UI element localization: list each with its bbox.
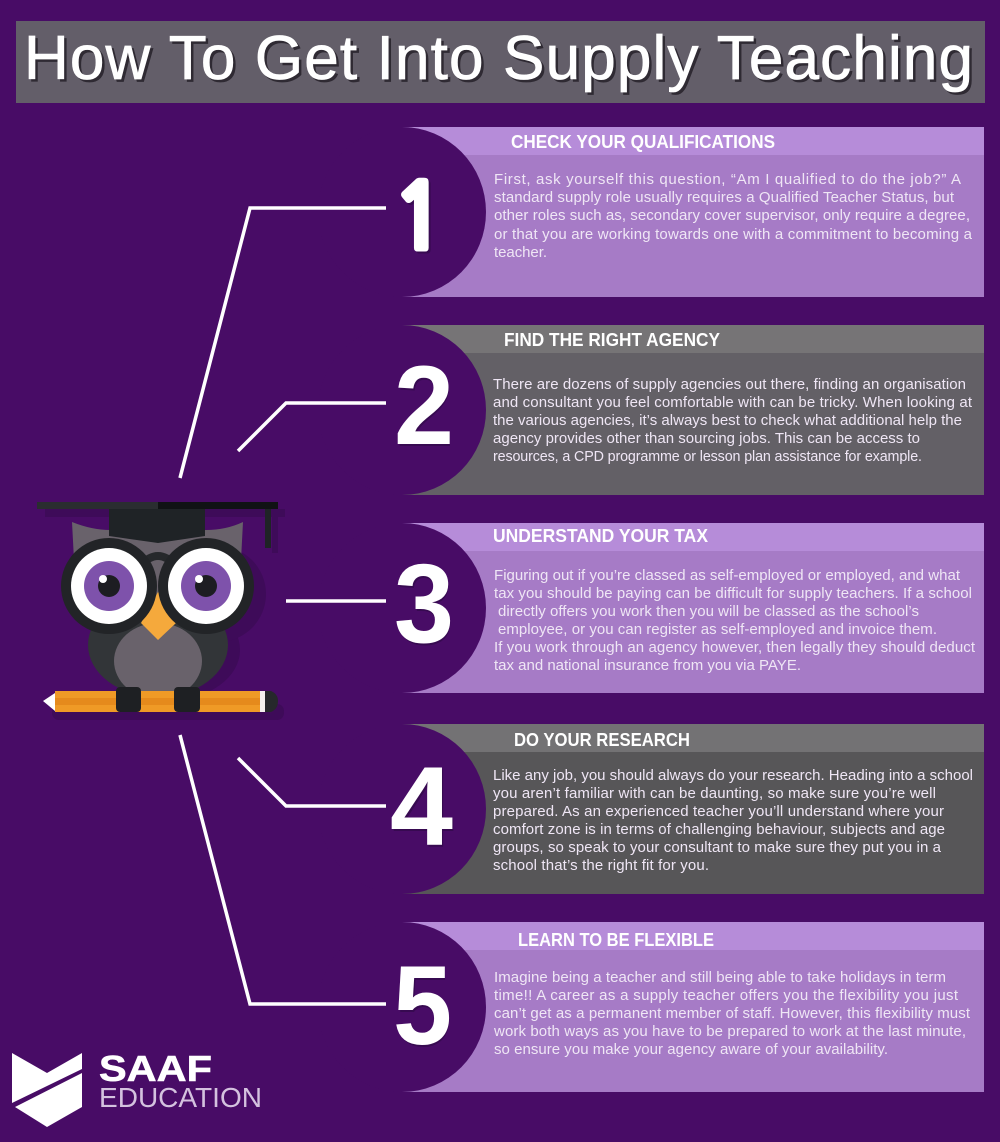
panel: step 5 learn to be flexible: time!! A career as a supply teacher offers you the flexibility you just — [494, 987, 959, 1004]
panel: step 2 find the right agency: and consultant you feel comfortable with can be tricky. When looking at — [493, 394, 973, 411]
panel: step 3 understand your tax: 3 — [396, 543, 454, 668]
panel: step 4 do your research: prepared. As an experienced teacher you’ll understand where your — [493, 803, 944, 820]
panel: step 3 understand your tax: directly offers you work then you will be classed as the school’s — [498, 603, 919, 620]
owl claws — [116, 687, 141, 712]
owl head and ears — [72, 522, 243, 610]
icon: owl with graduation cap and pencil — [37, 502, 285, 720]
panel: step 4 do your research: DO YOUR RESEARCH — [514, 730, 690, 750]
panel: step 4 do your research: Like any job, you should always do your research. Heading into a school — [493, 767, 973, 784]
panel: step 5 learn to be flexible: so ensure you make your agency aware of your availability. — [494, 1041, 888, 1058]
owl beak — [141, 592, 176, 640]
panel: step 2 find the right agency — [318, 325, 984, 495]
panel: step 3 understand your tax: 3 — [394, 541, 454, 666]
title banner: How To Get Into Supply Teaching — [24, 24, 973, 93]
panel: step 5 learn to be flexible: LEARN TO BE FLEXIBLE — [518, 930, 714, 950]
panel: step 1 check your qualifications: 1 — [394, 176, 449, 264]
panel: step 1 check your qualifications: or that you are working towards one with a commitment to becoming a — [494, 226, 973, 243]
logo: SAAF Education — [12, 1048, 262, 1127]
panel: step 2 find the right agency: the various agencies, it’s always best to check what additional help the — [493, 412, 962, 429]
panel: step 1 check your qualifications: First, ask yourself this question, “Am I qualified to do the job?” A — [494, 171, 961, 188]
logo: SAAF Education: SAAF — [99, 1048, 212, 1089]
panel: step 4 do your research: school that’s the right fit for you. — [493, 857, 709, 874]
panel: step 4 do your research: groups, so speak to your consultant to make sure they put you in a — [493, 839, 942, 856]
panel: step 3 understand your tax: employee, or you can register as self-employed and invoice them. — [498, 621, 937, 638]
panel: step 2 find the right agency: There are dozens of supply agencies out there, finding an organisation — [493, 376, 966, 393]
panel: step 2 find the right agency: agency provides other than sourcing jobs. This can be access to — [493, 430, 920, 447]
panel: step 1 check your qualifications: standard supply role usually requires a Qualified Teacher Status, but — [494, 189, 955, 206]
panel: step 1 check your qualifications: teacher. — [494, 244, 547, 261]
panel: step 2 find the right agency: resources, a CPD programme or lesson plan assistance for example. — [493, 449, 922, 465]
logo: SAAF Education: EDUCATION — [99, 1082, 262, 1113]
title banner: How To Get Into Supply Teaching — [26, 26, 976, 96]
panel: step 1 check your qualifications: 1 — [392, 174, 447, 262]
owl belly — [114, 623, 202, 699]
panel: step 1 check your qualifications: other roles such as, secondary cover supervisor, only require a degree, — [494, 207, 970, 224]
panel: step 3 understand your tax: tax and national insurance from you via PAYE. — [494, 657, 801, 674]
panel: step 5 learn to be flexible: Imagine being a teacher and still being able to take holidays in term — [494, 969, 946, 986]
panel: step 5 learn to be flexible: work both ways as you have to be prepared to work at the last minute, — [493, 1023, 966, 1040]
connector lines from owl to numbers — [180, 208, 386, 1004]
panel: step 4 do your research: comfort zone is in terms of challenging behaviour, subjects and age — [493, 821, 945, 838]
panel: step 2 find the right agency: 2 — [396, 345, 454, 470]
panel: step 3 understand your tax: Figuring out if you’re classed as self-employed or employed, and what — [494, 567, 961, 584]
panel: step 5 learn to be flexible: can’t get as a permanent member of staff. However, this flexibility must — [494, 1005, 971, 1022]
pencil — [43, 691, 278, 712]
panel: step 3 understand your tax — [318, 523, 984, 693]
panel: step 4 do your research: you aren’t familiar with can be daunting, so make sure you’re well — [493, 785, 936, 802]
panel: step 4 do your research: 4 — [392, 746, 454, 871]
panel: step 2 find the right agency: FIND THE RIGHT AGENCY — [504, 330, 720, 350]
owl body — [88, 593, 228, 697]
panel: step 3 understand your tax: UNDERSTAND YOUR TAX — [493, 526, 708, 546]
panel: step 4 do your research — [318, 724, 984, 894]
mortarboard cap — [37, 502, 278, 548]
panel: step 3 understand your tax: tax you should be paying can be difficult for supply teachers. If a school — [494, 585, 972, 602]
panel: step 1 check your qualifications: CHECK YOUR QUALIFICATIONS — [511, 132, 775, 152]
panel: step 5 learn to be flexible: 5 — [393, 943, 452, 1068]
panel: step 3 understand your tax: If you work through an agency however, then legally they should deduct — [494, 639, 976, 656]
panel: step 5 learn to be flexible: 5 — [395, 945, 452, 1070]
panel: step 2 find the right agency: 2 — [394, 343, 454, 468]
owl drop shadow — [45, 509, 285, 720]
panel: step 1 check your qualifications — [318, 127, 984, 297]
glasses and eyes — [61, 538, 254, 634]
panel: step 4 do your research: 4 — [390, 744, 453, 869]
panel: step 5 learn to be flexible — [318, 922, 984, 1092]
